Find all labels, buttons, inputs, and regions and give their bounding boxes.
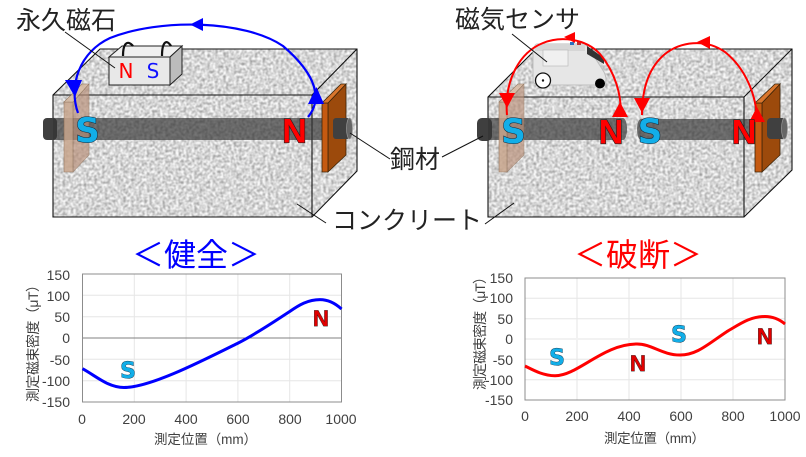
y axis ticks — [485, 270, 513, 408]
y axis ticks: -50 — [50, 352, 70, 368]
y axis ticks: -150 — [42, 394, 70, 410]
label: permanent magnet: 永久磁石 — [16, 1, 116, 37]
steel bar — [43, 118, 322, 140]
pole N: N — [599, 114, 623, 152]
concrete top face — [488, 49, 792, 97]
concrete side face — [744, 49, 792, 217]
plot frame — [525, 278, 785, 400]
label: steel: 鋼材 — [390, 140, 440, 176]
label: concrete: コンクリート — [332, 201, 482, 237]
permanent magnet: S — [147, 59, 159, 83]
right steel plate — [322, 84, 346, 172]
y axis title: 測定磁束密度（μT） — [25, 278, 41, 402]
y axis ticks — [42, 267, 70, 410]
pole marker N: N — [313, 306, 329, 331]
steel bar, fractured in two — [477, 118, 755, 141]
y axis ticks: 50 — [54, 309, 70, 325]
label: permanent magnet — [16, 1, 116, 68]
data line — [525, 316, 785, 376]
left steel plate translucent — [64, 84, 89, 172]
red field arc, right pair — [634, 36, 765, 122]
x axis ticks: 1000 — [325, 411, 357, 427]
y axis ticks: 50 — [497, 311, 513, 327]
y axis ticks: 100 — [47, 288, 70, 304]
label: magnetic sensor — [455, 0, 580, 62]
y axis ticks: -100 — [42, 373, 70, 389]
pole marker S: S — [671, 323, 687, 348]
pole marker S: S — [120, 359, 136, 384]
x axis ticks: 800 — [721, 408, 745, 424]
y axis ticks: -150 — [485, 392, 513, 408]
zero line — [82, 337, 342, 339]
permanent magnet: N — [119, 59, 133, 83]
left steel plate translucent — [499, 84, 524, 172]
x axis ticks — [521, 408, 801, 424]
concrete front face — [53, 95, 312, 217]
x axis ticks: 1000 — [769, 408, 801, 424]
concrete side face — [312, 49, 357, 217]
x axis title: 測定位置（mm） — [604, 431, 705, 446]
y axis title: 測定磁束密度（μT） — [472, 270, 488, 390]
x axis ticks: 0 — [78, 411, 86, 427]
blue magnetic field arc — [65, 18, 324, 117]
label: steel — [350, 133, 483, 176]
data line — [82, 300, 342, 388]
x axis ticks: 800 — [278, 411, 302, 427]
x axis ticks — [78, 411, 357, 427]
pole marker N: N — [757, 324, 773, 349]
block outline — [53, 49, 357, 217]
x axis ticks: 200 — [122, 411, 146, 427]
x axis ticks: 600 — [226, 411, 250, 427]
pole marker S: S — [549, 346, 565, 371]
bar end cylinder — [767, 118, 788, 139]
chart: healthy — [25, 267, 357, 447]
y axis ticks: 0 — [505, 331, 513, 347]
y axis ticks: -50 — [493, 352, 513, 368]
pole S: S — [638, 112, 662, 152]
plot frame — [82, 274, 342, 402]
permanent magnet — [109, 42, 182, 85]
x axis title: 測定位置（mm） — [154, 432, 257, 447]
pole marker N: N — [630, 351, 646, 376]
x axis ticks: 200 — [565, 408, 589, 424]
pole S: S — [75, 111, 100, 151]
pole S: S — [501, 112, 526, 152]
label: concrete — [297, 201, 514, 237]
x axis ticks: 400 — [174, 411, 198, 427]
block outline — [488, 49, 792, 217]
heading: healthy: ＜健全＞ — [132, 237, 260, 273]
y axis ticks: 100 — [490, 290, 513, 306]
zero line — [525, 338, 785, 340]
y axis ticks: 150 — [47, 267, 70, 283]
pole N: N — [282, 112, 307, 150]
heading: fractured: ＜破断＞ — [574, 237, 702, 273]
y axis ticks: 0 — [62, 330, 70, 346]
grid — [525, 278, 785, 400]
concrete top face — [53, 49, 357, 95]
red field arc, left pair — [499, 32, 628, 117]
grid — [82, 274, 342, 402]
right steel plate — [755, 84, 780, 172]
label: magnetic sensor: 磁気センサ — [455, 0, 580, 36]
x axis ticks: 600 — [669, 408, 693, 424]
panel: fractured concrete block — [477, 32, 792, 217]
pole N: N — [732, 114, 756, 152]
concrete front face — [488, 97, 744, 217]
y axis ticks: -100 — [485, 372, 513, 388]
magnetic sensor device — [533, 42, 606, 88]
bar end cylinder — [333, 118, 352, 139]
x axis ticks: 0 — [521, 408, 529, 424]
x axis ticks: 400 — [617, 408, 641, 424]
panel: healthy concrete block — [43, 18, 357, 217]
y axis ticks: 150 — [490, 270, 513, 286]
chart: fractured — [472, 270, 801, 446]
